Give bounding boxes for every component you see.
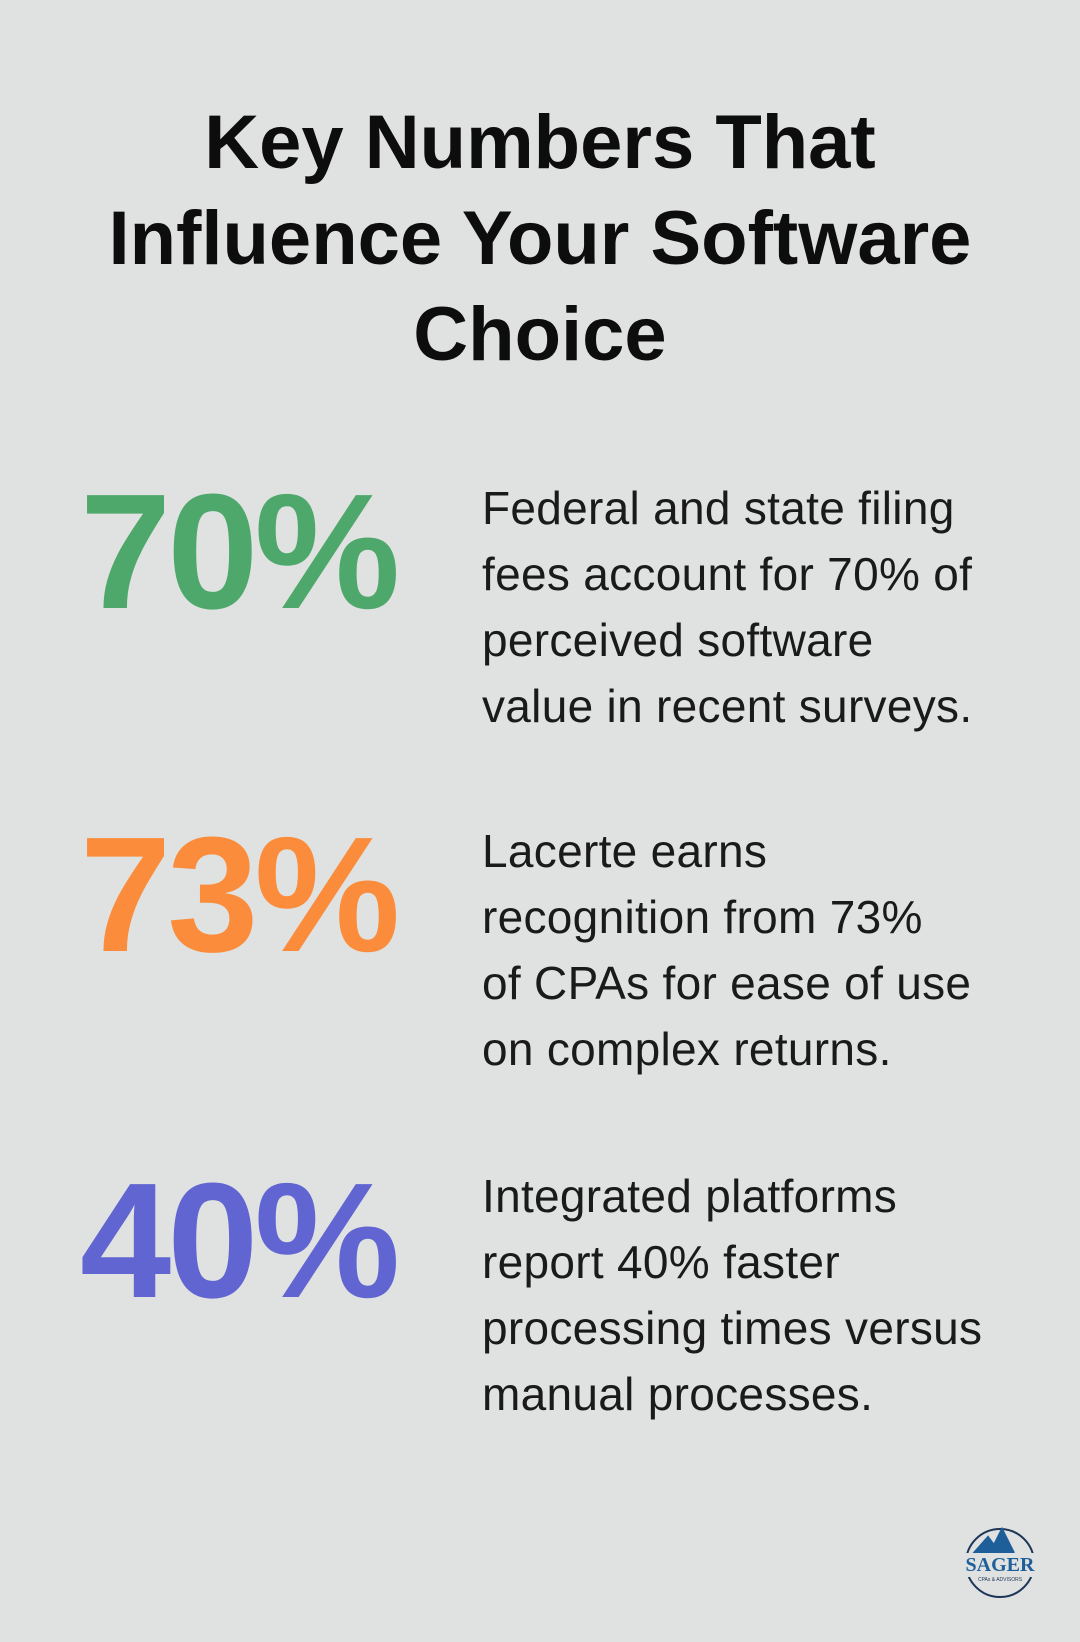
- logo: [966, 1526, 1035, 1598]
- stat 1 text: fees account for 70% of: [482, 548, 972, 600]
- title: [109, 100, 971, 377]
- stat 1 number: 70%: [80, 460, 396, 643]
- stat 3 number: 40%: [80, 1149, 396, 1332]
- stat 3 text: report 40% faster: [482, 1236, 840, 1288]
- stat 2 text: [482, 825, 971, 1075]
- stat 1 text: Federal and state filing: [482, 482, 955, 534]
- stat 3 text: processing times versus: [482, 1302, 982, 1354]
- stat 3 text: [482, 1170, 982, 1420]
- logo: CPAs & ADVISORS: [978, 1577, 1023, 1583]
- stat 2 text: of CPAs for ease of use: [482, 957, 971, 1009]
- stat 2 text: Lacerte earns: [482, 825, 767, 877]
- stat 2 text: recognition from 73%: [482, 891, 923, 943]
- logo: SAGER: [966, 1554, 1035, 1576]
- title: Key Numbers That: [204, 100, 876, 185]
- title: Choice: [413, 292, 667, 377]
- stat 1 text: perceived software: [482, 614, 873, 666]
- stat 1 text: value in recent surveys.: [482, 680, 972, 732]
- stat 2 text: on complex returns.: [482, 1023, 892, 1075]
- stat 2 number: 73%: [80, 803, 396, 986]
- title: Influence Your Software: [109, 196, 971, 281]
- stat 3 text: Integrated platforms: [482, 1170, 897, 1222]
- stat 3 text: manual processes.: [482, 1368, 873, 1420]
- stat 1 text: [482, 482, 972, 732]
